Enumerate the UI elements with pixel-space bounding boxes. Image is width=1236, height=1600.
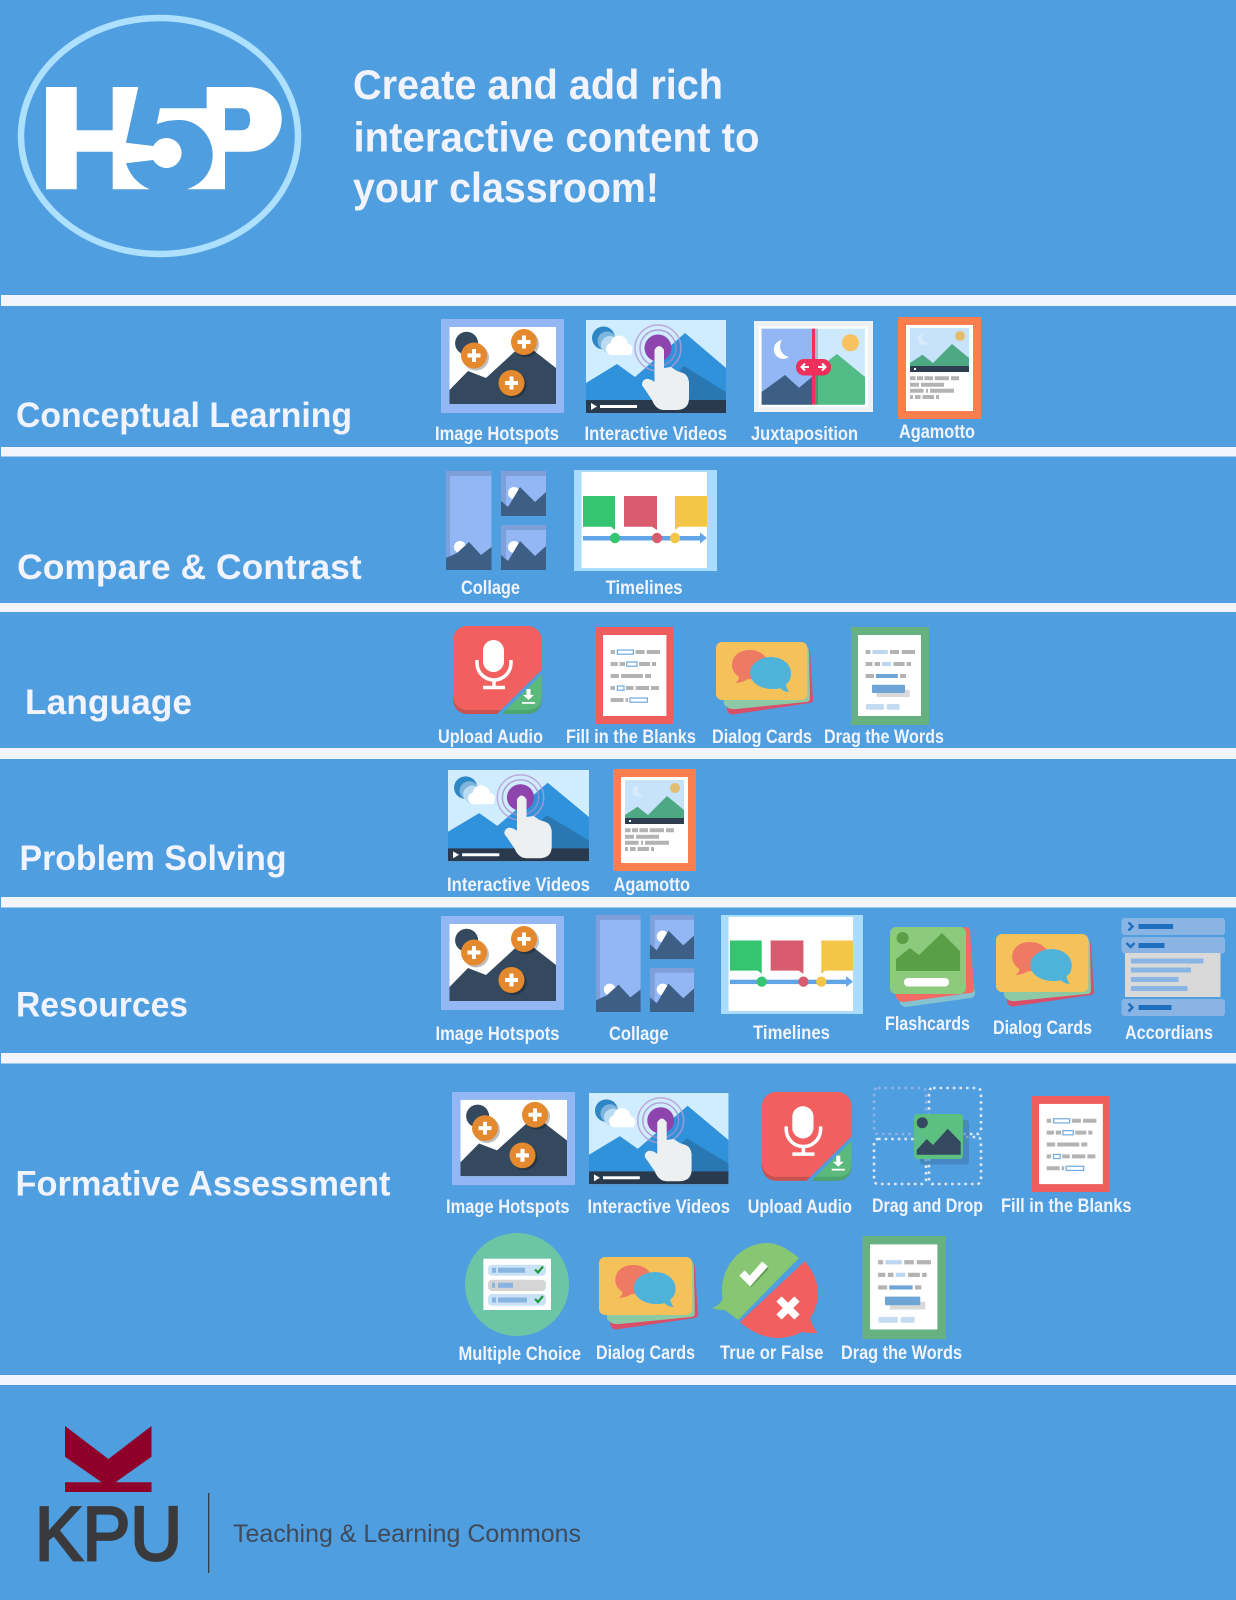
- item: interactive videos: Interactive Videos: [588, 1197, 730, 1218]
- item: fill in the blanks: Fill in the Blanks: [566, 727, 696, 748]
- heading: resources: Resources: [16, 986, 188, 1025]
- KPU wordmark: KPU: [35, 1492, 182, 1577]
- panel: formative assessment: [16, 1088, 1132, 1365]
- item: interactive videos: Interactive Videos: [584, 424, 727, 445]
- title: your classroom!: [353, 164, 659, 211]
- item: collage: [446, 471, 546, 599]
- item: fill in the blanks: Fill in the Blanks: [1001, 1196, 1132, 1217]
- item: interactive videos: Interactive Videos: [447, 875, 590, 896]
- heading: formative assessment: Formative Assessment: [16, 1165, 391, 1204]
- item: agamotto: [613, 769, 696, 896]
- item: agamotto: [898, 317, 981, 443]
- item: dialog cards: Dialog Cards: [596, 1343, 695, 1364]
- H5P logo: [21, 18, 298, 254]
- item: drag the words: Drag the Words: [824, 727, 944, 748]
- header: [21, 18, 760, 254]
- item: timelines: [721, 915, 863, 1044]
- teaching and learning commons text: Teaching & Learning Commons: [233, 1520, 581, 1548]
- panel: conceptual learning: [16, 317, 981, 445]
- item: image hotspots: [446, 1092, 575, 1218]
- item: dialog cards: Dialog Cards: [712, 727, 812, 748]
- heading: conceptual learning: Conceptual Learning: [16, 396, 352, 435]
- item: dialog cards: [596, 1257, 698, 1364]
- item: drag the words: [824, 627, 944, 748]
- item: dialog cards: [712, 642, 813, 748]
- item: true or false: [712, 1243, 824, 1364]
- item: flashcards: Flashcards: [885, 1014, 970, 1035]
- heading: language: Language: [25, 683, 192, 722]
- item: dialog cards: [993, 934, 1094, 1039]
- item: upload audio: Upload Audio: [438, 727, 543, 748]
- item: interactive videos: [588, 1093, 730, 1218]
- item: fill in the blanks: [566, 627, 696, 748]
- item: drag the words: [841, 1236, 962, 1364]
- item: image hotspots: [435, 319, 564, 445]
- item: true or false: True or False: [720, 1343, 824, 1364]
- item: juxtaposition: Juxtaposition: [751, 424, 858, 445]
- item: interactive videos: [584, 320, 727, 445]
- item: flashcards: [885, 927, 975, 1035]
- item: upload audio: [438, 626, 543, 748]
- item: drag the words: Drag the Words: [841, 1343, 962, 1364]
- item: agamotto: Agamotto: [899, 422, 975, 443]
- item: upload audio: [748, 1092, 852, 1218]
- title: [353, 61, 760, 211]
- panel: compare and contrast: [17, 470, 717, 599]
- item: drag and drop: [872, 1088, 983, 1217]
- item: drag and drop: Drag and Drop: [872, 1196, 983, 1217]
- item: agamotto: Agamotto: [614, 875, 690, 896]
- item: dialog cards: Dialog Cards: [993, 1018, 1092, 1039]
- item: juxtaposition: [751, 321, 873, 445]
- item: image hotspots: [436, 916, 564, 1045]
- item: accordians: [1122, 918, 1225, 1044]
- item: timelines: Timelines: [753, 1023, 830, 1044]
- panel: resources: [16, 915, 1225, 1045]
- item: image hotspots: Image Hotspots: [435, 424, 559, 445]
- item: multiple choice: [458, 1233, 581, 1365]
- item: multiple choice: Multiple Choice: [458, 1344, 581, 1365]
- heading: compare and contrast: Compare & Contrast: [17, 548, 362, 587]
- item: image hotspots: Image Hotspots: [436, 1024, 560, 1045]
- icon: KPU chevron: [65, 1426, 152, 1492]
- panel: language: [25, 626, 944, 748]
- panel: problem solving: [20, 769, 696, 896]
- item: collage: [596, 915, 694, 1045]
- item: collage: Collage: [609, 1024, 668, 1045]
- item: fill in the blanks: [1001, 1096, 1132, 1217]
- item: upload audio: Upload Audio: [748, 1197, 852, 1218]
- title: interactive content to: [354, 114, 760, 160]
- item: timelines: [574, 470, 717, 599]
- footer: KPU logo: [35, 1426, 581, 1577]
- item: interactive videos: [447, 770, 590, 896]
- title: Create and add rich: [353, 61, 723, 108]
- item: timelines: Timelines: [606, 578, 683, 599]
- item: accordians: Accordians: [1125, 1023, 1213, 1044]
- item: image hotspots: Image Hotspots: [446, 1197, 570, 1218]
- item: collage: Collage: [461, 578, 520, 599]
- heading: problem solving: Problem Solving: [20, 839, 286, 878]
